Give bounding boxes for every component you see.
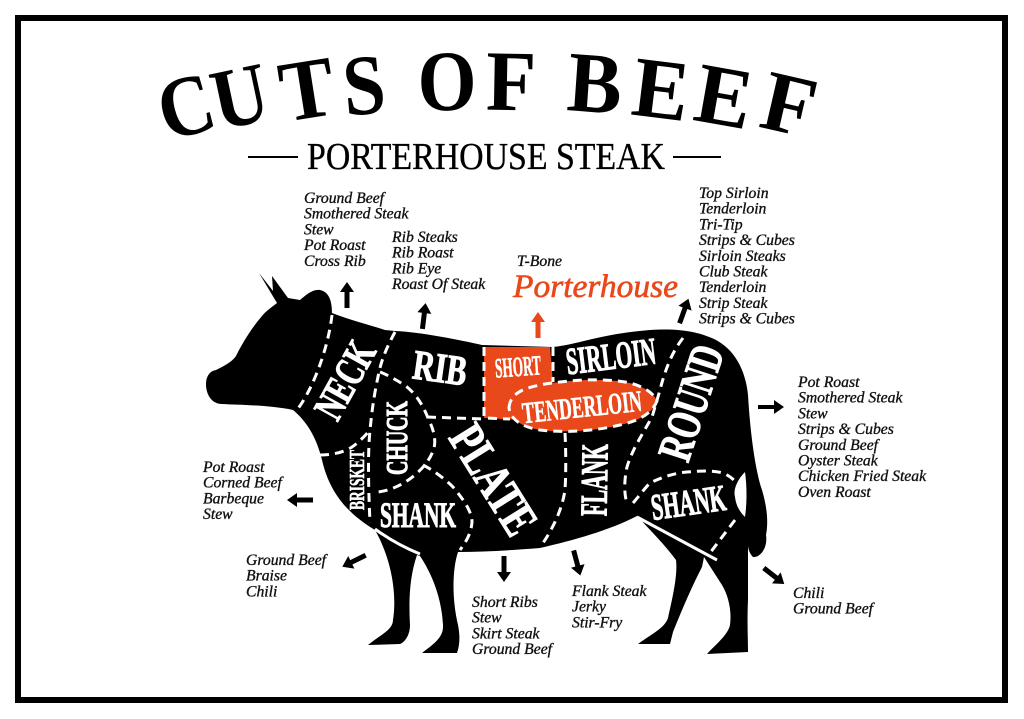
cut label: flank: FLANK [573, 443, 617, 516]
cut label: brisket: BRISKET [345, 450, 369, 510]
text block: sirloin uses: Tri-Tip [699, 216, 743, 233]
text block: round uses: Oven Roast [798, 484, 871, 501]
title [147, 33, 826, 160]
short loin orange section [484, 347, 553, 420]
text block: plate uses: Ground Beef [472, 641, 555, 658]
text block: neck uses: Ground Beef [304, 190, 387, 207]
cut label: fore shank: SHANK [380, 495, 456, 535]
cut label: tenderloin: TENDERLOIN [521, 385, 644, 430]
arrow: neck [340, 282, 354, 308]
text block: flank uses: Stir-Fry [572, 614, 622, 631]
cow diagram: SHORT [494, 350, 542, 385]
text block: neck uses: Pot Roast [303, 237, 366, 254]
text block: fore shank uses: Ground Beef [246, 552, 329, 569]
white leg lines [375, 517, 717, 560]
arrow: porterhouse [531, 312, 545, 338]
arrow: hind shank [759, 562, 789, 590]
title: U [203, 44, 277, 149]
text block: t-bone: T-Bone [517, 253, 562, 270]
text block: sirloin uses: Tenderloin [699, 201, 767, 218]
text block: sirloin uses: Strips & Cubes [699, 311, 795, 328]
title: O [417, 33, 477, 130]
title: T [273, 38, 341, 141]
cut lines [297, 315, 737, 553]
title: F [485, 34, 537, 130]
highlighted label: porterhouse: Porterhouse [512, 269, 678, 305]
text block: round uses: Ground Beef [798, 437, 881, 454]
text block: fore shank uses: Chili [246, 583, 277, 600]
text block: flank uses: Flank Steak [571, 583, 648, 600]
text block: plate uses: Short Ribs [472, 594, 538, 611]
arrow: flank [567, 549, 587, 577]
cow diagram [206, 273, 767, 654]
title: E [688, 45, 760, 148]
text block: sirloin uses: Sirloin Steaks [699, 248, 786, 265]
text block: sirloin uses: Strips & Cubes [699, 232, 795, 249]
text block: flank uses: Jerky [572, 599, 606, 616]
text block: rib uses: Rib Eye [391, 260, 441, 277]
text block: round uses: Pot Roast [797, 374, 860, 391]
title: B [565, 34, 626, 133]
subtitle: PORTERHOUSE STEAK [307, 136, 665, 178]
text block: sirloin uses: Top Sirloin [699, 185, 769, 202]
text block: brisket uses: Pot Roast [202, 459, 265, 476]
text block: hind shank uses: Chili [793, 585, 824, 602]
arrow: round [758, 400, 784, 414]
text block: neck uses: Smothered Steak [304, 206, 409, 223]
text block: hind shank uses: Ground Beef [793, 601, 876, 618]
text block: rib uses: Rib Steaks [391, 229, 458, 246]
cut label: chuck: CHUCK [379, 401, 414, 475]
cut label: plate: PLATE [438, 414, 549, 545]
cut label: rib: RIB [410, 342, 470, 396]
arrow: rib [415, 302, 433, 330]
text block: brisket uses: Barbeque [203, 490, 264, 507]
text block: round uses: Smothered Steak [798, 390, 903, 407]
cut label: sirloin: SIRLOIN [564, 331, 658, 383]
cut label: neck: NECK [306, 333, 386, 427]
text block: brisket uses: Stew [203, 506, 233, 523]
arrow: sirloin [673, 296, 695, 326]
text block: neck uses: Stew [304, 221, 334, 238]
cut label: hind shank: SHANK [649, 478, 729, 529]
title: E [627, 39, 695, 140]
text block: brisket uses: Corned Beef [203, 475, 284, 492]
tenderloin orange section [509, 380, 657, 431]
arrow: fore shank [339, 549, 369, 573]
text block: round uses: Strips & Cubes [798, 421, 894, 438]
text block: plate uses: Skirt Steak [472, 625, 541, 642]
text block: fore shank uses: Braise [246, 568, 287, 585]
text block: sirloin uses: Club Steak [699, 264, 768, 280]
arrow: brisket [287, 493, 313, 507]
text block: round uses: Chicken Fried Steak [798, 468, 927, 485]
text block: neck uses: Cross Rib [304, 253, 366, 270]
arrow: plate [497, 556, 511, 582]
title: S [339, 36, 389, 135]
text block: rib uses: Rib Roast [391, 245, 454, 262]
cut label: round: ROUND [648, 339, 735, 467]
text block: round uses: Oyster Steak [798, 452, 879, 470]
text block: sirloin uses: Tenderloin [699, 279, 767, 296]
white crescent [734, 472, 746, 517]
title: F [753, 51, 826, 157]
text block: round uses: Stew [798, 405, 828, 422]
text block: plate uses: Stew [472, 610, 502, 627]
text block: rib uses: Roast Of Steak [391, 276, 486, 293]
title: C [147, 53, 225, 160]
text block: sirloin uses: Strip Steak [699, 295, 768, 312]
cow silhouette [206, 273, 767, 654]
